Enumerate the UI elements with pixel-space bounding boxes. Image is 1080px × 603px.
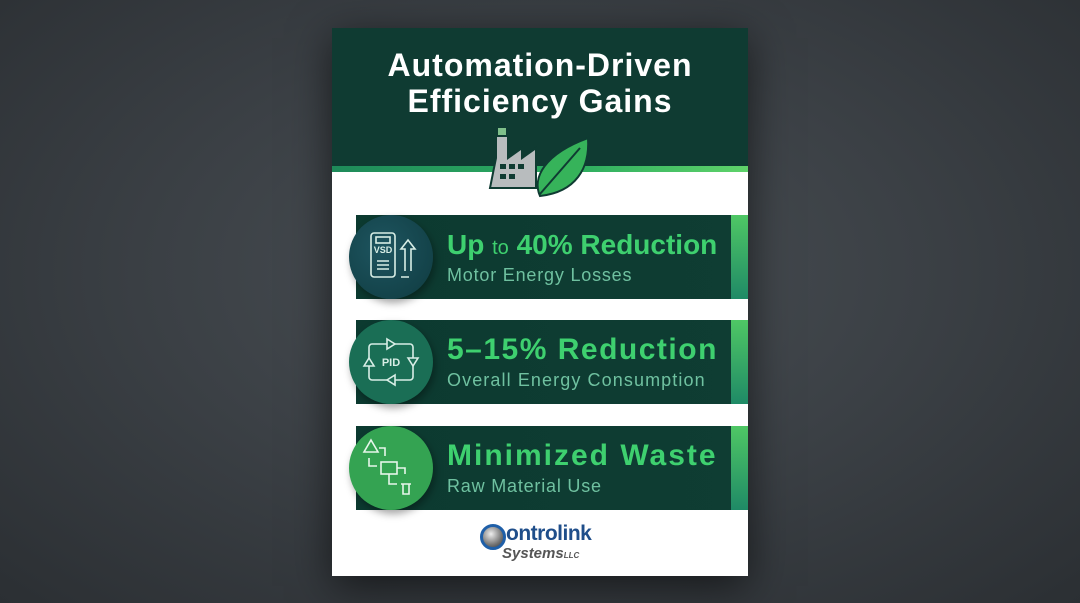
icon: factory and leaf xyxy=(488,128,588,198)
header panel xyxy=(332,28,748,166)
title: Automation-Driven xyxy=(388,47,692,83)
stat: 5-15%: 5–15% Reduction xyxy=(447,333,718,366)
stat: up to 40%: Up to 40% Reduction xyxy=(447,229,717,260)
logo xyxy=(480,522,592,562)
stat: minimized waste: Minimized Waste xyxy=(447,439,718,472)
icon: PID: PID xyxy=(382,357,400,369)
poster card: Motor Energy Losses xyxy=(447,265,632,285)
poster card: Raw Material Use xyxy=(447,476,602,496)
icon: PID xyxy=(349,320,433,404)
poster card xyxy=(332,28,748,576)
title: Efficiency Gains xyxy=(408,83,672,119)
icon: waste flow xyxy=(349,426,433,510)
icon: VSD xyxy=(349,215,433,299)
panel: overall energy xyxy=(356,320,748,404)
logo: SystemsLLC xyxy=(502,545,579,562)
panel: waste xyxy=(356,426,748,510)
icon: VSD: VSD xyxy=(374,245,393,255)
logo: ontrolink xyxy=(506,522,591,545)
title xyxy=(388,47,692,119)
panel: motor energy xyxy=(356,215,748,299)
poster card: Overall Energy Consumption xyxy=(447,370,706,390)
